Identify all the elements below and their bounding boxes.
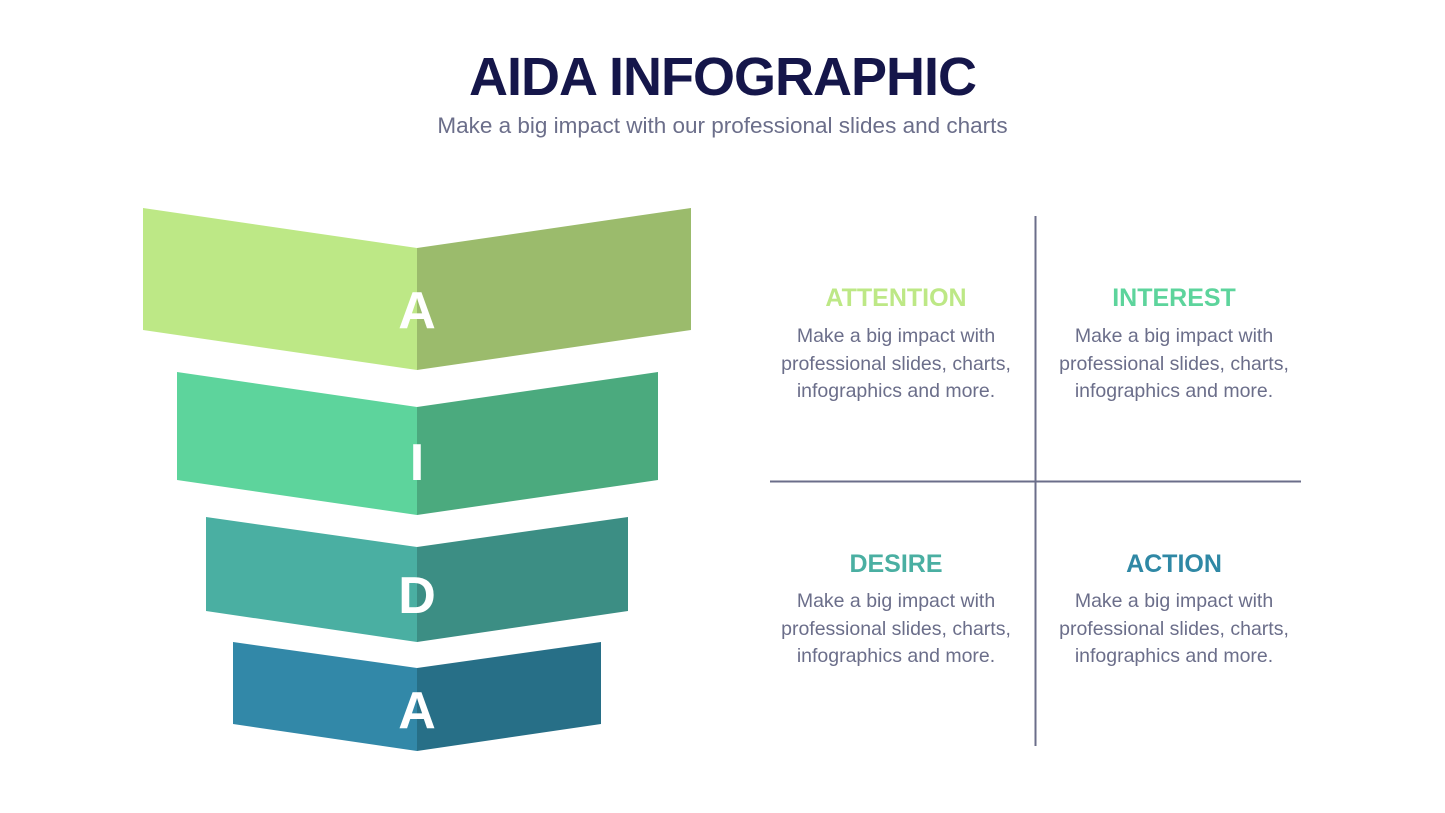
text: desire: infographics and more. [797, 645, 995, 667]
text: attention: Make a big impact with [797, 325, 995, 347]
stage: action [233, 642, 601, 751]
text: attention: infographics and more. [797, 380, 995, 402]
text: interest: infographics and more. [1075, 380, 1273, 402]
text: action: Make a big impact with [1075, 590, 1273, 612]
text: interest: professional slides, charts, [1059, 352, 1289, 374]
text: attention: professional slides, charts, [781, 352, 1011, 374]
stage: interest: I [410, 434, 424, 492]
subtitle: Make a big impact with our professional slides and charts [437, 113, 1008, 138]
text: action: professional slides, charts, [1059, 618, 1289, 640]
text: action [1059, 590, 1289, 667]
text: attention [781, 325, 1011, 402]
text: desire: professional slides, charts, [781, 618, 1011, 640]
stage: attention [143, 208, 691, 370]
text: interest [1059, 325, 1289, 402]
stage: desire [206, 517, 628, 642]
heading: interest: INTEREST [1112, 284, 1236, 312]
stage: desire: D [398, 567, 436, 625]
stage: action: A [398, 682, 436, 740]
text: interest: Make a big impact with [1075, 325, 1273, 347]
title: AIDA INFOGRAPHIC [469, 47, 976, 107]
stage: attention: A [398, 282, 436, 340]
text: desire [781, 590, 1011, 667]
text: action: infographics and more. [1075, 645, 1273, 667]
heading: desire: DESIRE [849, 550, 943, 578]
text: desire: Make a big impact with [797, 590, 995, 612]
heading: action: ACTION [1126, 550, 1222, 578]
funnel chart [143, 208, 691, 751]
stage: interest [177, 372, 658, 515]
heading: attention: ATTENTION [825, 284, 967, 312]
